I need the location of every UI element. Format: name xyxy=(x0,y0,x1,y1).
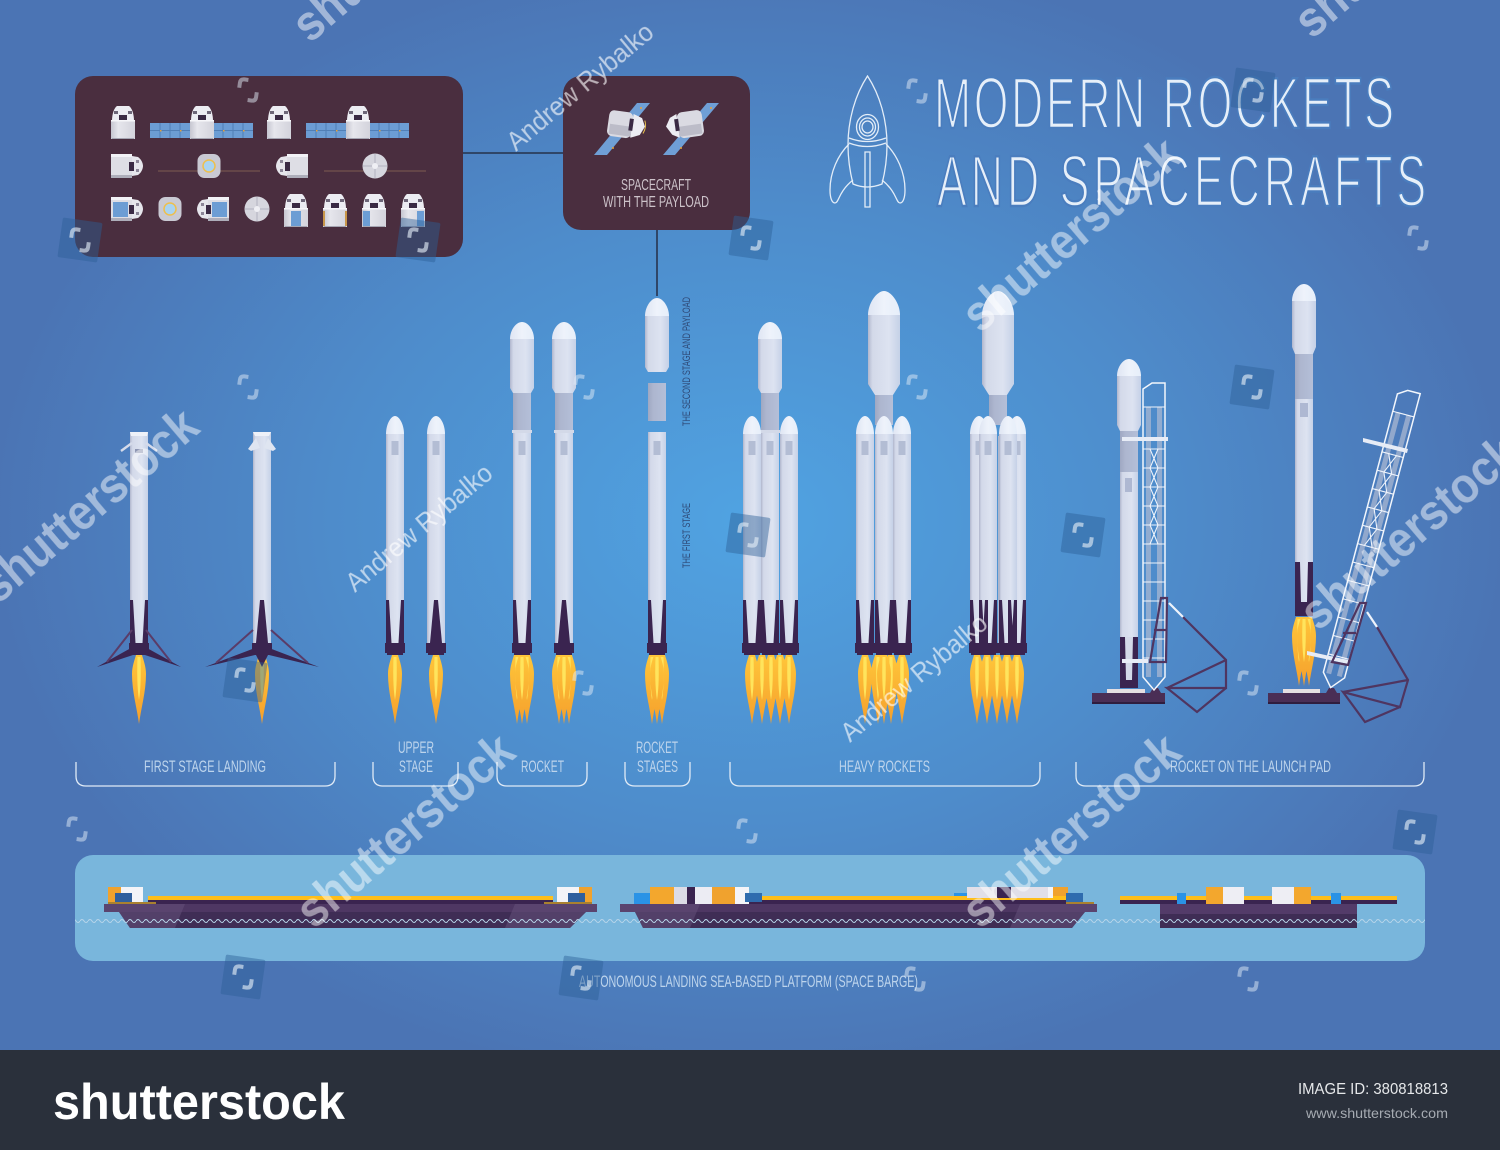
barge 2 xyxy=(620,887,1097,928)
author watermark: Andrew Rybalko xyxy=(501,17,659,157)
tilted hinge frame xyxy=(1332,603,1408,722)
site url: www.shutterstock.com xyxy=(1305,1105,1448,1121)
section labels: FIRST STAGE LANDING xyxy=(144,757,266,776)
pad xyxy=(1092,688,1165,704)
section labels: ROCKET xyxy=(521,757,564,776)
footer bar xyxy=(0,1050,1500,1150)
watermark text: shutterstock xyxy=(285,722,525,938)
section labels: STAGE xyxy=(399,757,433,776)
rockets: upper stage xyxy=(385,416,446,724)
icon: spacecraft right xyxy=(663,103,719,155)
sprite row 3 xyxy=(111,194,425,227)
tilted tower xyxy=(1320,388,1420,690)
image id: IMAGE ID: 380818813 xyxy=(1298,1081,1448,1098)
vertical stage labels: THE FIRST STAGE xyxy=(681,503,693,568)
launch pad 1 xyxy=(1092,359,1226,712)
rockets: heavy rocket 2 xyxy=(855,291,912,724)
watermark icons xyxy=(57,67,1438,1001)
author watermark xyxy=(340,17,993,748)
title xyxy=(934,63,1426,222)
landing rocket with compact legs xyxy=(97,432,181,724)
panel: spacecraft sprites xyxy=(75,76,463,257)
rockets: heavy rocket 3 xyxy=(969,291,1027,724)
panel caption: SPACECRAFT xyxy=(621,177,691,194)
author watermark: Andrew Rybalko xyxy=(835,608,993,748)
rockets: first stage landing xyxy=(97,432,319,724)
section brackets xyxy=(76,762,1424,786)
title: AND SPACECRAFTS xyxy=(937,141,1426,222)
panel: spacecraft with the payload xyxy=(563,76,750,230)
second stage xyxy=(648,383,666,421)
panel: sea platforms xyxy=(75,855,1425,961)
panel caption: WITH THE PAYLOAD xyxy=(603,194,709,211)
sprite row 1 xyxy=(111,106,409,139)
watermark text: shutterstock xyxy=(951,126,1191,342)
section labels: UPPER xyxy=(398,738,434,757)
barge 1 xyxy=(104,887,597,928)
barge caption: AUTONOMOUS LANDING SEA-BASED PLATFORM (SPACE BARGE) xyxy=(579,972,918,991)
icon: rocket outline xyxy=(830,76,905,207)
section labels: STAGES xyxy=(637,757,678,776)
fairing stage xyxy=(645,298,669,372)
section labels xyxy=(144,738,1331,776)
first stage xyxy=(645,432,669,724)
footer logo: shutterstock xyxy=(53,1074,345,1130)
connector lines xyxy=(463,153,657,296)
launching rocket xyxy=(1292,284,1316,686)
sprite row 2 xyxy=(111,154,426,178)
rockets: heavy rocket 1 xyxy=(742,322,799,724)
section labels: ROCKET xyxy=(636,738,678,757)
section labels: HEAVY ROCKETS xyxy=(839,757,930,776)
tower xyxy=(1143,383,1165,690)
vertical stage labels xyxy=(681,297,693,568)
title: MODERN ROCKETS xyxy=(934,63,1394,144)
tilted tower arms xyxy=(1307,438,1408,664)
rocket on pad xyxy=(1117,359,1141,688)
watermark text: shutterstock xyxy=(951,722,1191,938)
rockets: rocket xyxy=(510,322,576,724)
tower arms xyxy=(1122,437,1168,663)
landing rocket with wide legs xyxy=(205,432,319,724)
hinge frame xyxy=(1150,598,1226,712)
launch pad 2 xyxy=(1268,284,1420,722)
water line xyxy=(75,917,1425,923)
author watermark: Andrew Rybalko xyxy=(340,458,498,598)
icon: spacecraft left xyxy=(594,103,650,155)
rockets: rocket stages xyxy=(645,297,693,724)
vertical stage labels: THE SECOND STAGE AND PAYLOAD xyxy=(681,297,693,426)
section labels: ROCKET ON THE LAUNCH PAD xyxy=(1170,757,1331,776)
panel caption xyxy=(603,177,709,211)
barge 3 xyxy=(1120,887,1397,928)
pad xyxy=(1268,688,1340,704)
